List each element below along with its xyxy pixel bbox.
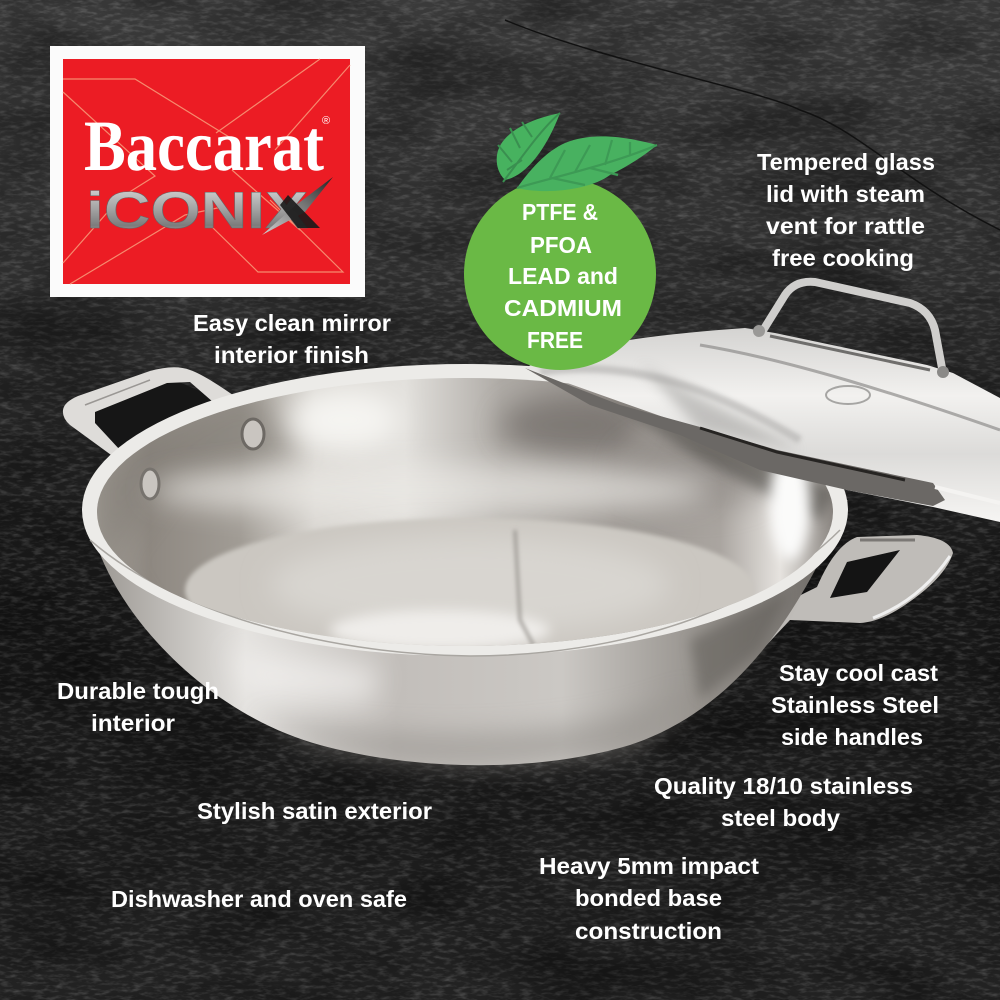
badge text	[504, 199, 622, 353]
feature: lid	[757, 149, 935, 271]
pan rivets	[141, 419, 264, 499]
logo: Baccarat Iconix: ®	[322, 115, 330, 127]
feature: lid: Tempered glass	[757, 149, 935, 175]
glass lid with handle	[525, 282, 1000, 522]
badge text: PFOA	[530, 232, 592, 258]
feature: mirror interior: interior finish	[214, 342, 369, 368]
feature: bonded base: Heavy 5mm impact	[539, 853, 759, 879]
pan right handle	[735, 535, 953, 653]
pan interior	[90, 370, 840, 662]
logo wordmark: Baccarat: Baccarat	[84, 106, 324, 186]
feature: satin exterior: Stylish satin exterior	[197, 798, 432, 824]
feature: lid: vent for rattle	[766, 213, 925, 239]
feature: bonded base	[539, 853, 759, 944]
feature: lid: free cooking	[772, 245, 914, 271]
badge text: LEAD and	[508, 263, 618, 289]
feature: handles: Stainless Steel	[771, 692, 939, 718]
feature: stainless body: Quality 18/10 stainless	[654, 773, 913, 799]
feature: mirror interior: Easy clean mirror	[193, 310, 391, 336]
logo: Baccarat Iconix	[50, 46, 365, 297]
feature: dishwasher safe: Dishwasher and oven safe	[111, 886, 407, 912]
badge text: CADMIUM	[504, 295, 622, 321]
feature: handles	[771, 660, 939, 750]
lid handle	[762, 282, 942, 368]
feature: stainless body	[654, 773, 913, 831]
pan body exterior	[95, 500, 848, 765]
feature: durable interior: interior	[91, 710, 175, 736]
feature: handles: side handles	[781, 724, 923, 750]
feature: stainless body: steel body	[721, 805, 840, 831]
pan floor	[183, 518, 748, 645]
pan rim	[82, 364, 848, 656]
feature: lid: lid with steam	[766, 181, 925, 207]
lid knob rivets	[753, 325, 765, 337]
badge text: PTFE &	[522, 199, 598, 225]
pan left handle	[63, 367, 240, 460]
feature: bonded base: construction	[575, 918, 722, 944]
feature: handles: Stay cool cast	[779, 660, 938, 686]
feature: durable interior: Durable tough	[57, 678, 219, 704]
badge text: FREE	[527, 327, 583, 353]
feature: bonded base: bonded base	[575, 885, 722, 911]
logo wordmark: iconix: iCONIX	[86, 182, 308, 240]
small leaf	[497, 113, 560, 180]
eco badge: green circle with leaves	[464, 113, 657, 370]
large leaf	[517, 136, 657, 191]
lid dark rim	[525, 368, 945, 506]
feature: durable interior	[57, 678, 219, 736]
feature: mirror interior	[193, 310, 391, 368]
